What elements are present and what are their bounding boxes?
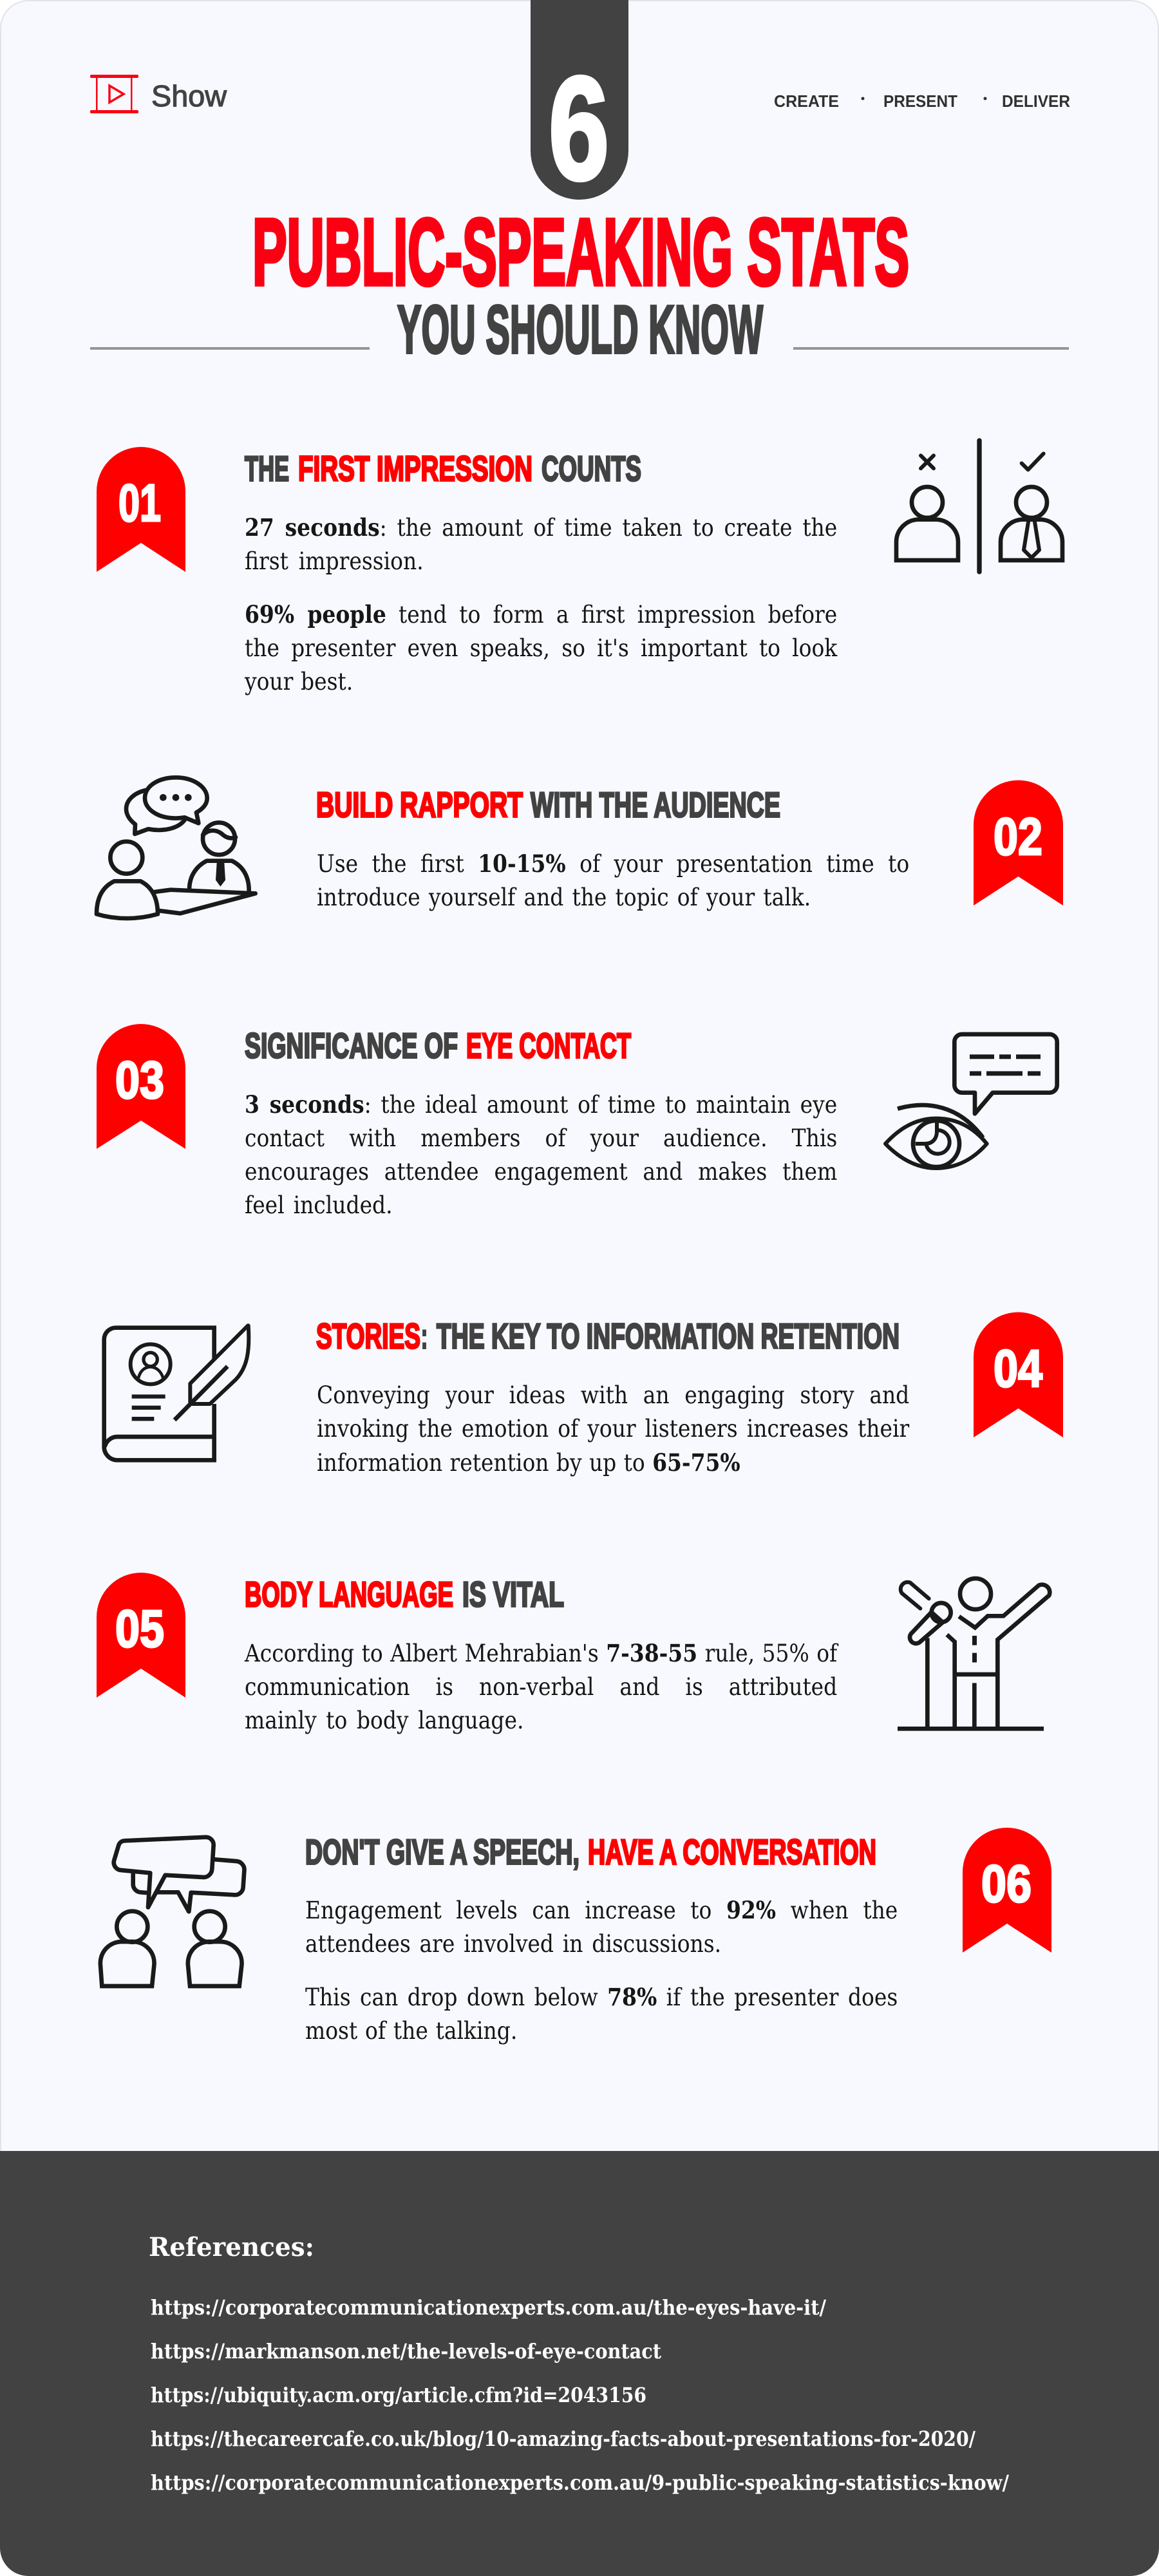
references list [151,2295,1010,2495]
ribbon badge 04 [974,1312,1063,1437]
number tab: 6 [531,0,628,211]
icon: two people with speech bubbles [100,1837,244,1986]
body text: Use the first 10-15% of your presentation time to [317,849,909,878]
heading [245,1027,631,1066]
ribbon badge 05: 05 [115,1600,164,1658]
references list: https://markmanson.net/the-levels-of-eye-contact [151,2338,661,2363]
ribbon badge 03 [97,1024,185,1149]
body text: Engagement levels can increase to 92% when the [305,1896,898,1924]
ribbon badge 02: 02 [994,808,1042,866]
body text: first impression. [245,547,424,575]
references list: https://corporatecommunicationexperts.com.au/the-eyes-have-it/ [151,2295,827,2320]
heading: COUNTS [542,450,641,489]
title: PUBLIC-SPEAKING STATS [252,200,909,305]
ribbon badge 05 [97,1573,185,1698]
ribbon badge 04: 04 [994,1340,1042,1398]
body text: According to Albert Mehrabian's 7-38-55 rule, 55% of [245,1639,837,1667]
body text: encourages attendee engagement and makes them [245,1158,837,1186]
tagline: create present deliver [774,91,1070,111]
heading: FIRST IMPRESSION [298,450,532,489]
body text: 3 seconds: the ideal amount of time to maintain eye [245,1090,837,1119]
subtitle with rules: YOU SHOULD KNOW [397,292,763,368]
ribbon badge 06 [963,1828,1051,1953]
body text: This can drop down below 78% if the presenter does [305,1983,898,2011]
body text: mainly to body language. [245,1707,523,1734]
tagline: create present deliver: PRESENT [883,91,957,111]
body text: 69% people tend to form a first impression before [245,600,837,629]
heading [305,1833,876,1872]
number tab: 6: 6 [549,47,609,211]
panel: stat 05 body language [97,1573,1052,1734]
heading [316,786,780,825]
heading [245,450,641,489]
heading: STORIES [316,1317,420,1356]
body text: the presenter even speaks, so it's important to look [245,634,837,662]
panel: stat 01 first impression [97,438,1065,696]
icon: two people talking at a table [97,777,256,918]
heading: HAVE A CONVERSATION [588,1833,876,1872]
body text: most of the talking. [305,2017,517,2045]
body text: information retention by up to 65-75% [317,1448,740,1477]
references list: https://thecareercafe.co.uk/blog/10-amazing-facts-about-presentations-for-2020/ [151,2426,976,2451]
body text: introduce yourself and the topic of your talk. [317,884,811,911]
body text [305,1896,898,2045]
body text: communication is non-verbal and is attributed [245,1673,837,1701]
icon: eye with speech bubble [885,1034,1057,1168]
heading: BODY LANGUAGE [245,1575,453,1615]
icon: two people, wrong and right dress [896,440,1062,572]
body text: your best. [245,668,353,696]
heading: WITH THE AUDIENCE [531,786,780,825]
ribbon badge 06: 06 [981,1855,1032,1913]
body text [245,1090,837,1219]
body text [245,513,837,696]
body text [317,1381,909,1477]
heading: SIGNIFICANCE OF [245,1027,458,1066]
references heading: References: [149,2231,314,2262]
heading: BUILD RAPPORT [316,786,523,825]
heading: THE KEY TO INFORMATION RETENTION [437,1317,900,1356]
icon: speaker with microphone [898,1578,1050,1731]
body text: attendees are involved in discussions. [305,1930,721,1958]
subtitle with rules [90,292,1069,368]
panel: references footer [0,2151,1159,2576]
heading [245,1575,564,1615]
panel: stat 06 conversation [98,1828,1051,2045]
body text: 27 seconds: the amount of time taken to create the [245,513,837,542]
body text: feel included. [245,1191,393,1219]
panel: stat 04 stories [102,1312,1063,1477]
ribbon badge 03: 03 [115,1051,164,1110]
logo: Show [90,75,227,113]
ribbon badge 01: 01 [118,474,161,533]
heading: THE [245,450,289,489]
panel: stat 03 eye contact [97,1024,1059,1219]
body text [317,849,909,911]
references list: https://corporatecommunicationexperts.com.au/9-public-speaking-statistics-know/ [151,2470,1010,2495]
icon: book and quill [104,1325,249,1460]
ribbon badge 02 [974,781,1063,905]
references list: https://ubiquity.acm.org/article.cfm?id=2043156 [151,2382,646,2407]
heading: DON'T GIVE A SPEECH, [305,1833,580,1872]
panel: header [90,0,1070,368]
panel: stat 02 rapport [94,775,1063,921]
heading: IS VITAL [462,1575,564,1615]
logo: Show: Show [151,79,227,113]
body text: contact with members of your audience. This [245,1124,837,1152]
heading: EYE CONTACT [466,1027,631,1066]
tagline: create present deliver: CREATE [774,91,839,111]
body text [245,1639,838,1734]
ribbon badge 01 [97,447,185,572]
tagline: create present deliver: DELIVER [1002,91,1070,111]
body text: Conveying your ideas with an engaging story and [317,1381,909,1409]
heading [316,1317,900,1356]
body text: invoking the emotion of your listeners increases their [317,1415,909,1443]
heading: : [421,1317,428,1356]
